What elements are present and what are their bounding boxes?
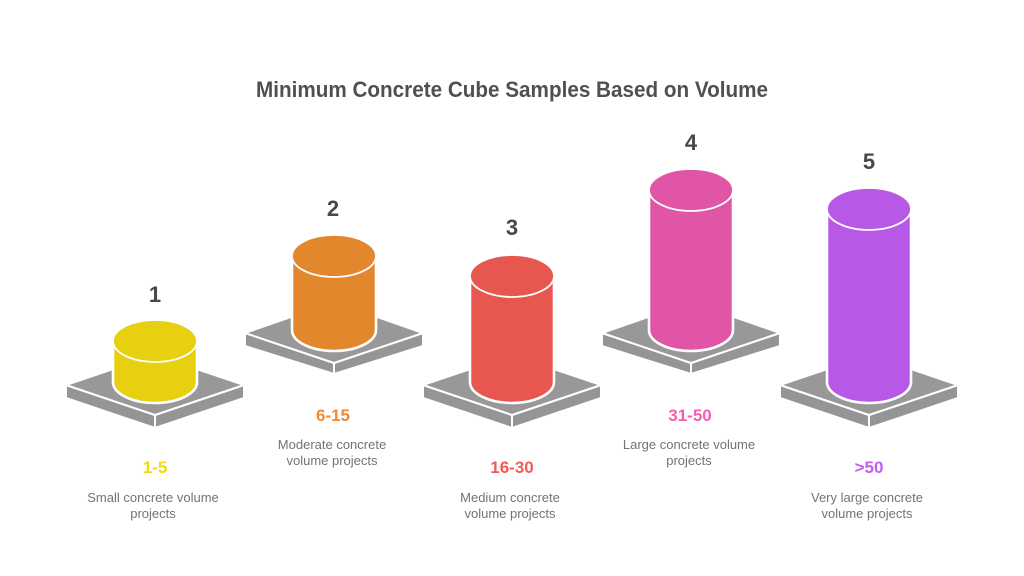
range 16-30: 16-30 [490,458,534,477]
description 2: volume projects [286,453,378,468]
title: Minimum Concrete Cube Samples Based on Volume [256,77,768,102]
description 3: Medium concrete [460,490,560,505]
description 4: projects [666,453,712,468]
range >50: >50 [855,458,883,477]
base plate 5 [780,355,958,428]
range 31-50: 31-50 [668,406,712,425]
base plate 2 [245,302,423,374]
range 6-15: 6-15 [316,406,350,425]
description 5: volume projects [821,506,913,521]
range 1-5: 1-5 [143,458,167,477]
description 1: Small concrete volume [87,490,219,505]
cylinder 2 [292,235,376,351]
column 1: yellow cylinder on base [66,282,244,521]
description 2: Moderate concrete [278,437,386,452]
cylinder 1 [113,320,197,403]
cylinder 4 [649,169,733,351]
column 2: orange cylinder on base [245,196,423,468]
column 5: purple cylinder on base [780,149,958,521]
number 5: 5 [863,149,875,174]
description 1: projects [130,506,176,521]
number 4: 4 [685,130,698,155]
number 1: 1 [149,282,161,307]
number 3: 3 [506,215,518,240]
base plate 3 [423,355,601,428]
description 4: Large concrete volume [623,437,755,452]
cylinder 5 [827,188,911,403]
column 4: pink cylinder on base [602,130,780,468]
base plate 1 [66,355,244,428]
column 3: red cylinder on base [423,215,601,521]
description 3: volume projects [464,506,556,521]
base plate 4 [602,302,780,374]
number 2: 2 [327,196,339,221]
cylinder 3 [470,255,554,403]
description 5: Very large concrete [811,490,923,505]
